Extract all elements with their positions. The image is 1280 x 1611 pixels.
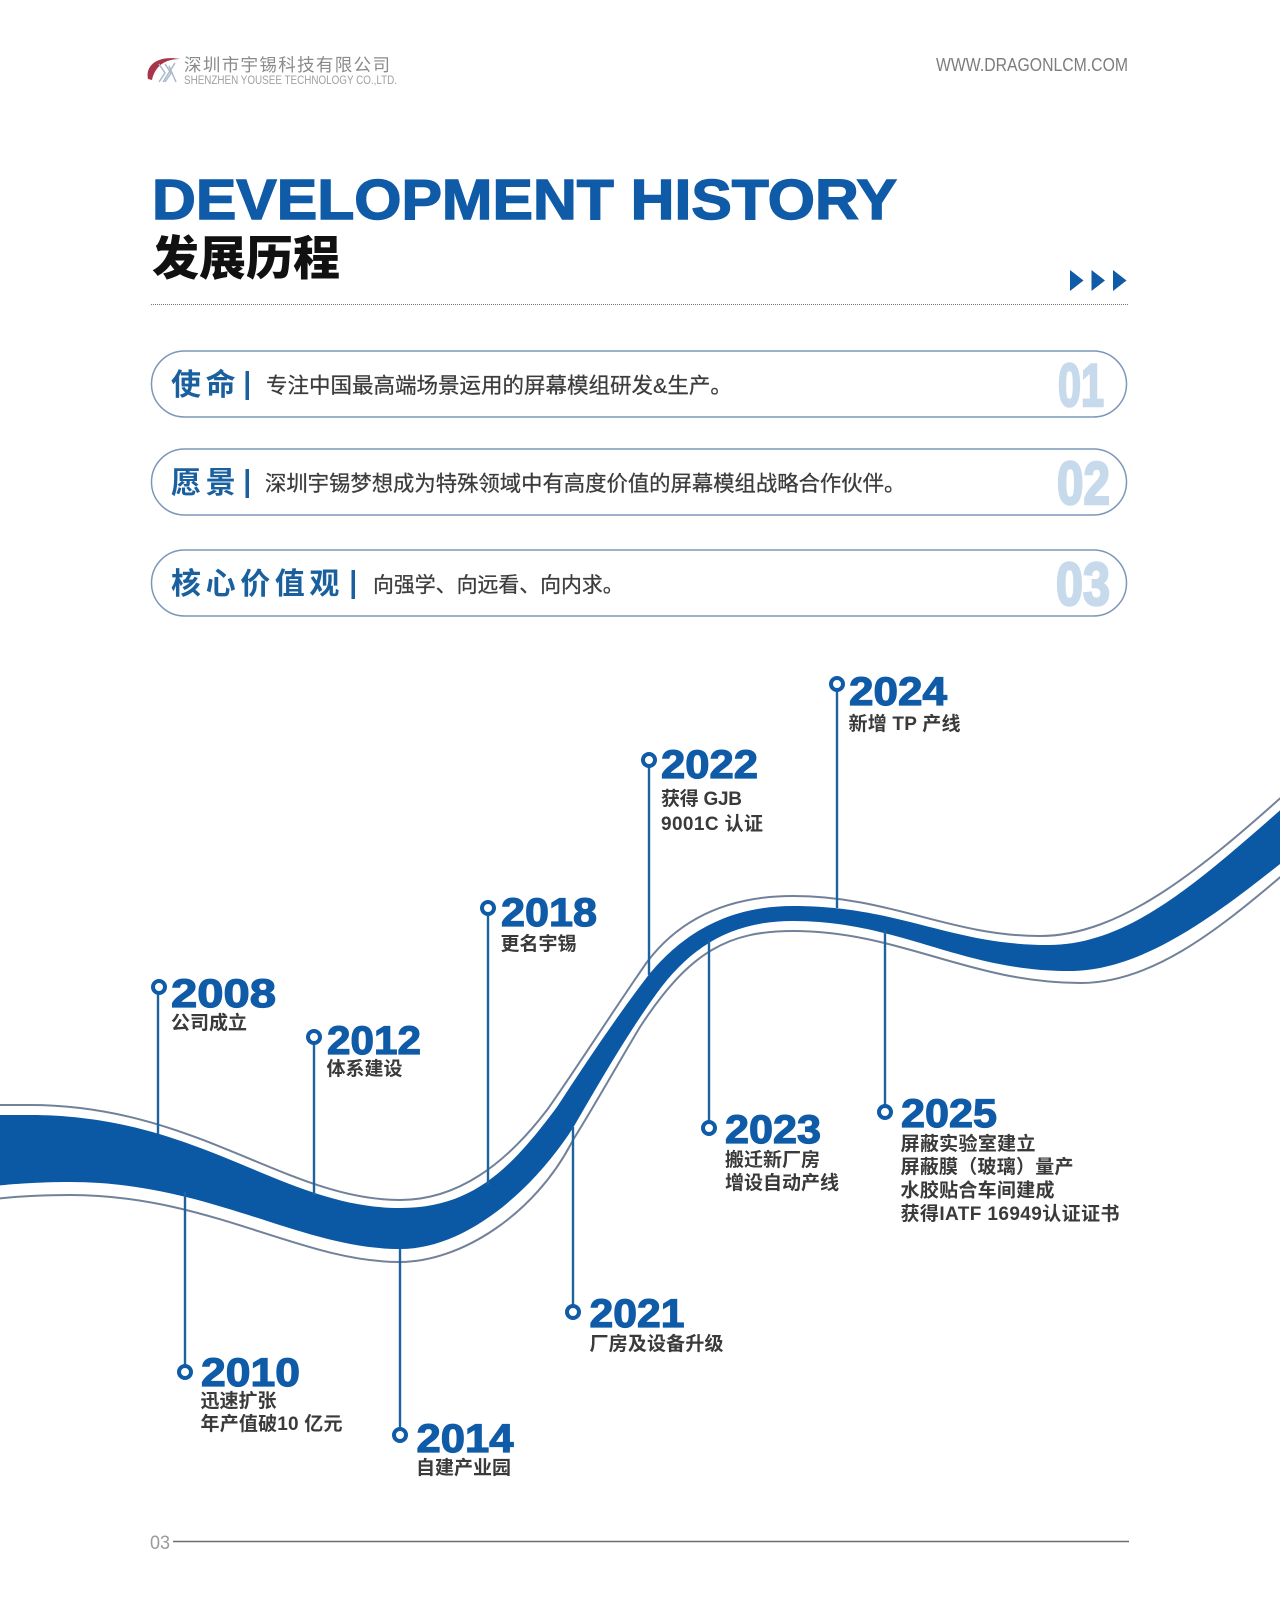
milestone 2024 <box>831 670 960 908</box>
title: chinese heading: 发展历程 <box>152 232 340 285</box>
milestone 2014 <box>394 1249 514 1479</box>
milestone 2022: 9001C 认证 <box>661 813 763 835</box>
milestone 2010: 2010 <box>201 1351 300 1395</box>
panel: mission: 01 <box>1058 352 1104 419</box>
milestone 2022 <box>643 743 763 975</box>
panel: mission <box>152 351 1126 419</box>
logo: company mark and name <box>148 55 397 87</box>
milestone 2018: 2018 <box>501 891 597 935</box>
panel: mission: 使命 <box>171 368 240 402</box>
website url: WWW.DRAGONLCM.COM <box>936 54 1128 75</box>
milestone 2010 <box>179 1192 342 1435</box>
panel: core values <box>152 550 1126 618</box>
milestone 2008: 2008 <box>171 972 276 1016</box>
milestone 2023: 搬迁新厂房 <box>725 1148 820 1171</box>
panel: core values: 向强学、向远看、向内求。 <box>373 574 624 597</box>
title: english heading: DEVELOPMENT HISTORY <box>152 168 897 232</box>
milestone 2010: 迅速扩张 <box>200 1390 277 1412</box>
milestone 2012: 2012 <box>327 1019 421 1063</box>
milestone 2025: 水胶贴合车间建成 <box>900 1178 1054 1202</box>
milestone 2014: 自建产业园 <box>416 1457 511 1479</box>
milestone 2024: 2024 <box>849 670 948 714</box>
panel: mission: 专注中国最高端场景运用的屏幕模组研发&生产。 <box>266 374 732 398</box>
icon: three arrows <box>1070 270 1126 291</box>
panel: vision: 愿景 <box>171 467 240 500</box>
milestone 2023: 2023 <box>725 1108 821 1152</box>
chart: ribbon timeline curve <box>0 794 1280 1262</box>
panel: vision: 深圳宇锡梦想成为特殊领域中有高度价值的屏幕模组战略合作伙伴。 <box>265 472 905 496</box>
page number: 03 <box>150 1533 170 1554</box>
milestone 2012: 体系建设 <box>326 1058 403 1080</box>
milestone 2025: 2025 <box>901 1092 997 1136</box>
panel: vision: 02 <box>1057 450 1110 517</box>
milestone 2021 <box>567 1127 724 1355</box>
milestone 2012 <box>308 1019 421 1195</box>
milestone 2025: 屏蔽膜（玻璃）量产 <box>900 1156 1074 1178</box>
panel: core values: 03 <box>1056 551 1110 618</box>
logo: company mark and name: SHENZHEN YOUSEE TECHNOLOGY CO.,LTD. <box>184 73 397 87</box>
milestone 2024: 新增 TP 产线 <box>848 713 960 735</box>
milestone 2018 <box>482 891 597 1185</box>
milestone 2022: 2022 <box>661 743 758 787</box>
milestone 2018: 更名宇锡 <box>500 933 577 955</box>
milestone 2022: 获得 GJB <box>661 788 742 810</box>
logo: company mark and name: 深圳市宇锡科技有限公司 <box>184 55 390 75</box>
milestone 2014: 2014 <box>416 1417 514 1461</box>
milestone 2021: 厂房及设备升级 <box>590 1332 724 1355</box>
panel: vision <box>152 449 1126 517</box>
milestone 2010: 年产值破10 亿元 <box>200 1412 342 1435</box>
milestone 2023 <box>703 940 839 1194</box>
milestone 2025: 屏蔽实验室建立 <box>900 1132 1036 1155</box>
milestone 2008: 公司成立 <box>171 1011 247 1034</box>
milestone 2023: 增设自动产线 <box>725 1172 839 1194</box>
milestone 2021: 2021 <box>590 1292 684 1336</box>
milestone 2025 <box>879 930 1120 1225</box>
panel: core values: 核心价值观 <box>171 568 344 601</box>
milestone 2025: 获得IATF 16949认证证书 <box>900 1203 1120 1225</box>
milestone 2008 <box>153 972 276 1134</box>
